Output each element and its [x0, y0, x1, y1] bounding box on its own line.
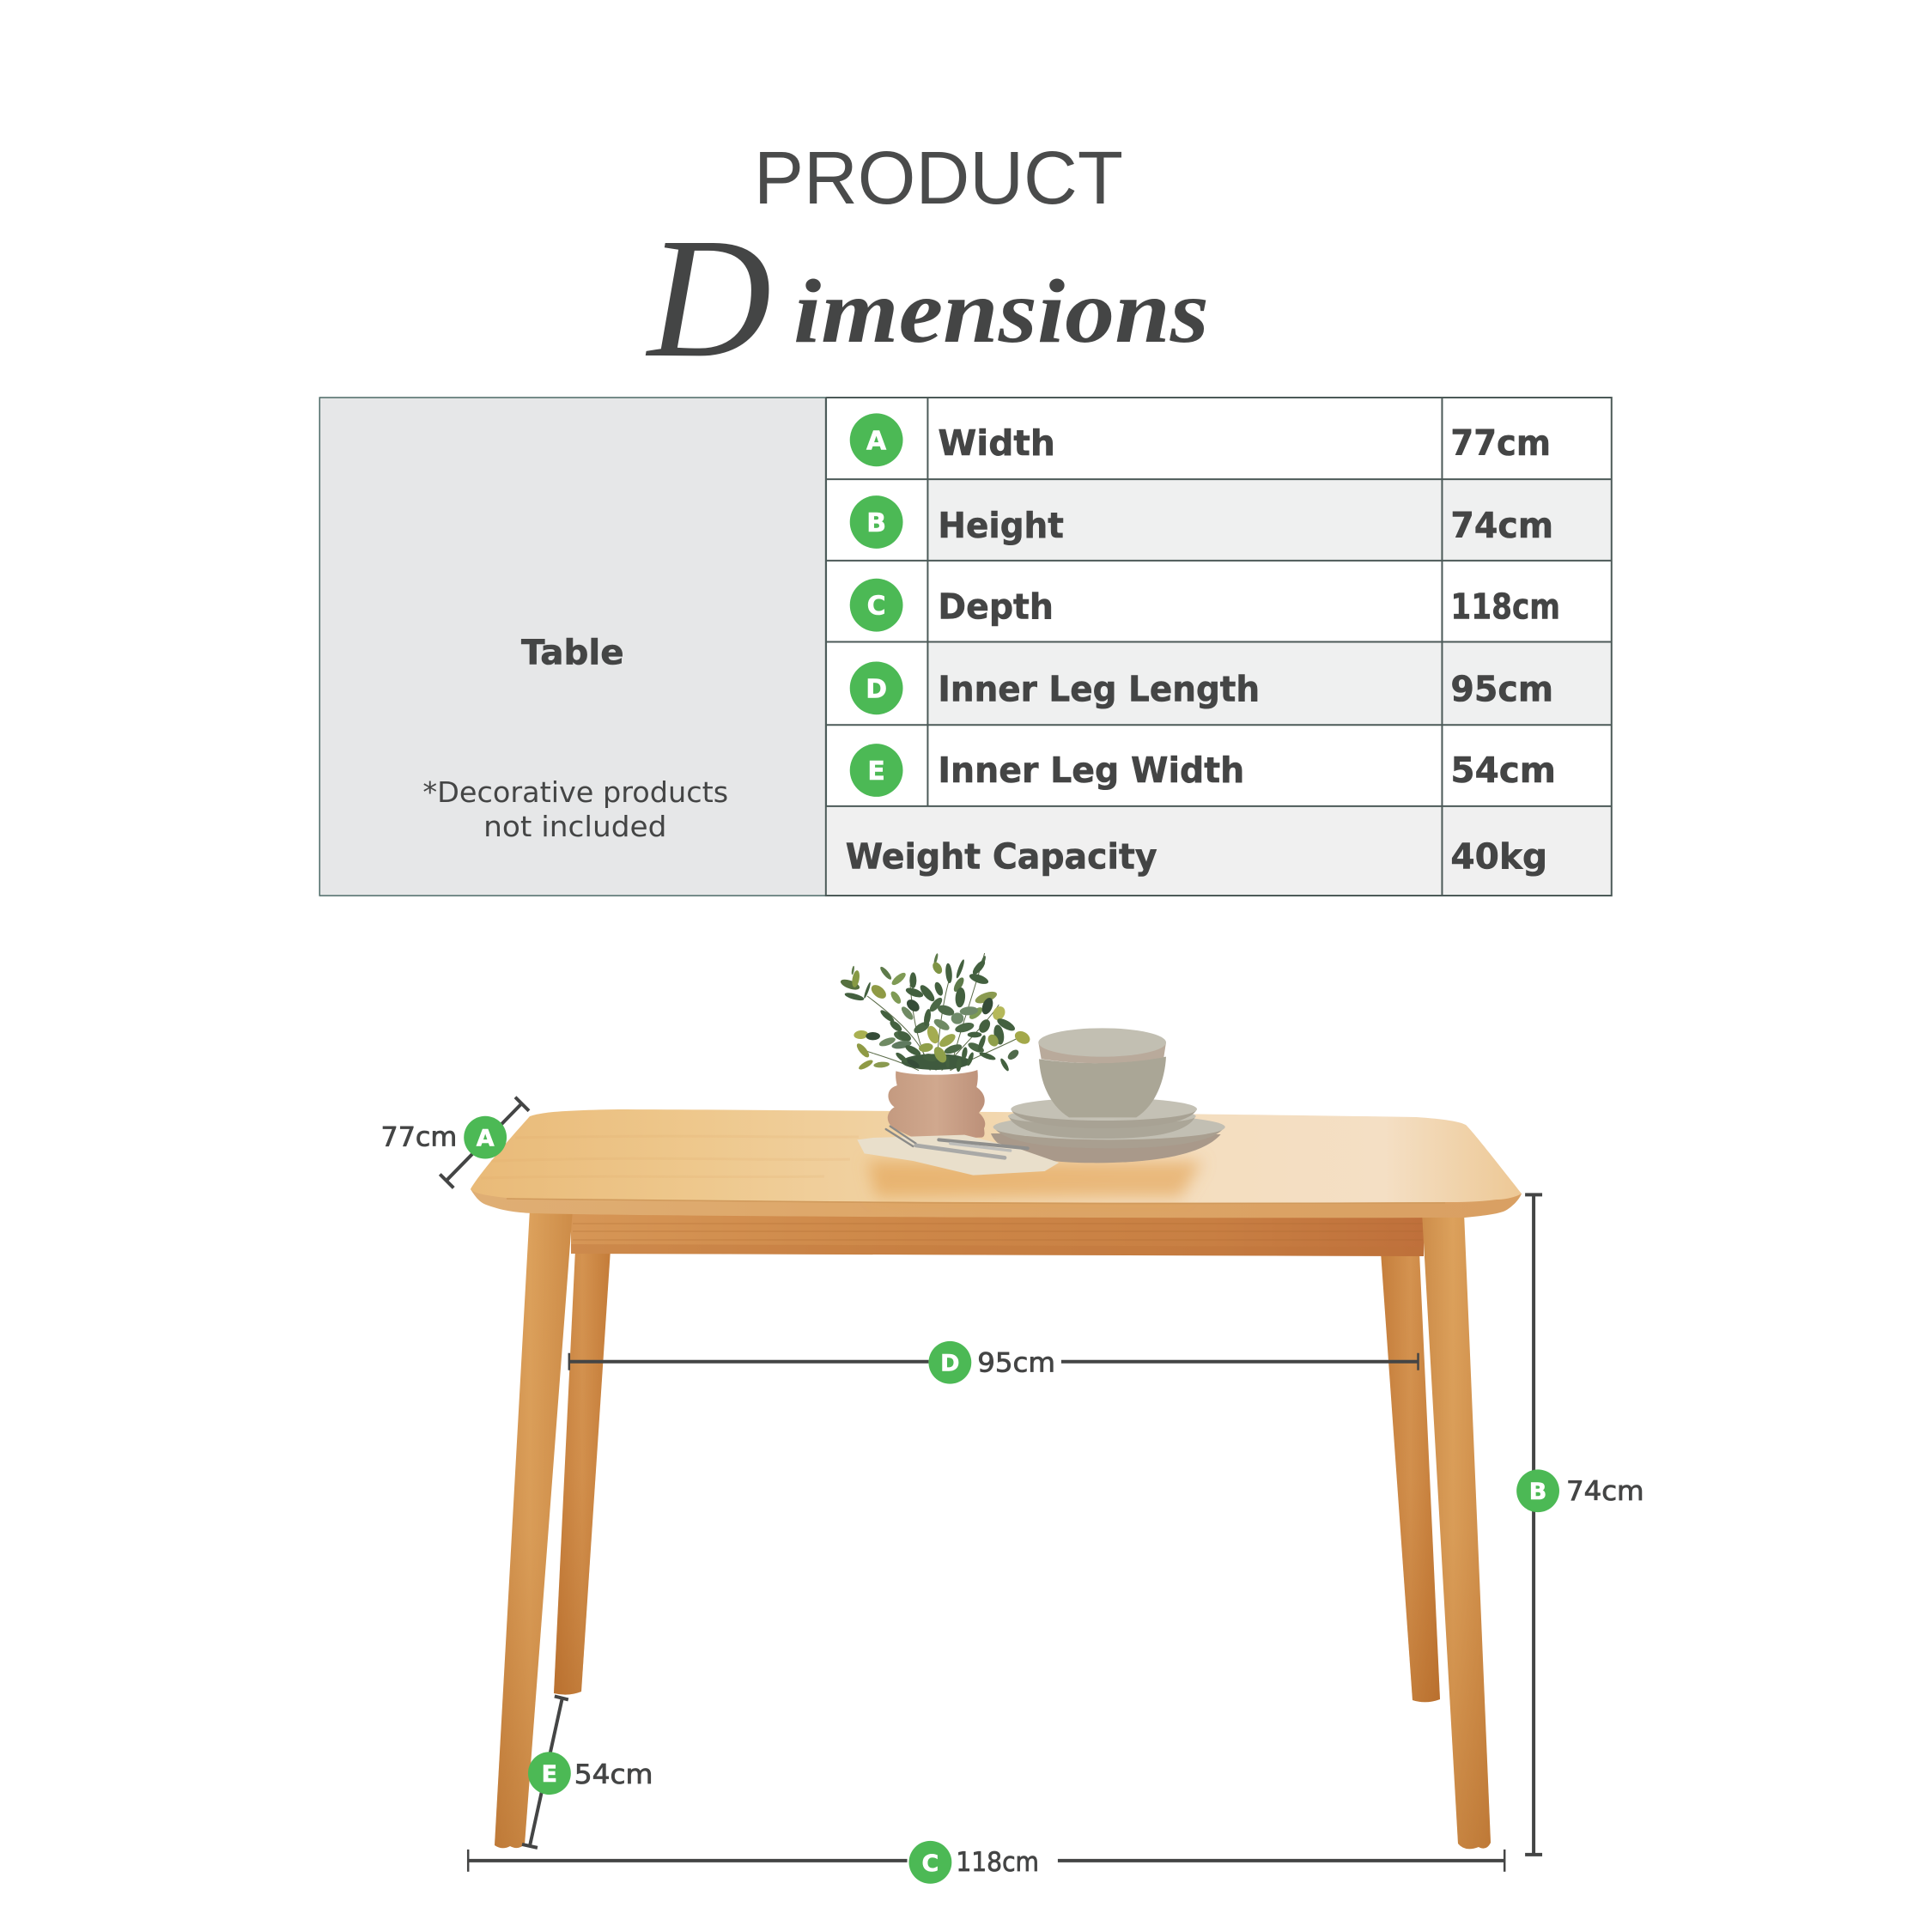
title: Dimensions script: imensions: [793, 261, 1209, 361]
upper bowl: [1038, 1028, 1166, 1063]
dimension A: 77cm: 77cm: [381, 1122, 457, 1153]
row C: Depth: Depth: [938, 586, 1054, 628]
row shading: Weight Capacity: [826, 806, 1612, 896]
row: Weight Capacity: [846, 836, 1547, 878]
plant leaves: [839, 958, 1032, 1072]
title: Dimensions script: D: [645, 204, 771, 393]
plant stems: [865, 953, 1016, 1071]
row: Weight Capacity: 40kg: [1450, 836, 1547, 878]
second plate: [1008, 1108, 1196, 1139]
dimension A: 77cm: A: [477, 1126, 495, 1152]
top plate: [1011, 1097, 1197, 1128]
front left leg: [495, 1209, 573, 1848]
title: PRODUCT: PRODUCT: [754, 137, 1123, 220]
apron: [571, 1212, 1424, 1256]
dimension D: 95cm: [569, 1341, 1419, 1384]
panel: table name cell: [319, 398, 826, 896]
dimension B: 74cm: B: [1529, 1479, 1546, 1505]
label: Table: Table: [521, 633, 624, 672]
row B: Height: B: [866, 508, 886, 538]
dimension C: 118cm: [468, 1841, 1504, 1884]
dimension D: 95cm: 95cm: [977, 1348, 1055, 1379]
dimension E: 54cm: E: [542, 1761, 557, 1788]
cutlery: [886, 1127, 1028, 1157]
row D: Inner Leg Length: [850, 661, 1553, 714]
row E: Inner Leg Width: E: [867, 756, 885, 787]
napkin: [857, 1135, 1059, 1176]
row C: Depth: [850, 579, 1560, 632]
row D: Inner Leg Length: 95cm: [1450, 668, 1553, 709]
row A: Width: [850, 413, 1551, 466]
row A: Width: 77cm: [1450, 422, 1551, 464]
table top grain: [481, 1136, 859, 1178]
decor: plant, pot, tableware: [839, 953, 1225, 1176]
specification table: [319, 397, 1612, 896]
dimension E: 54cm: 54cm: [574, 1759, 653, 1790]
plant foliage mass: [851, 953, 987, 1070]
dimension B: 74cm: [1516, 1194, 1644, 1855]
row C: Depth: 118cm: [1450, 586, 1560, 628]
terracotta pot: [888, 1070, 985, 1139]
dimension A: 77cm: [381, 1097, 529, 1188]
decor reflection: [867, 1161, 1202, 1197]
lower bowl: [1039, 1057, 1166, 1117]
dimension C: 118cm: C: [922, 1850, 939, 1877]
dimension D: 95cm: D: [940, 1351, 960, 1377]
row: Weight Capacity: Weight Capacity: [846, 836, 1157, 878]
back right leg: [1381, 1252, 1440, 1702]
back left leg: [554, 1249, 611, 1695]
row B: Height: [850, 495, 1553, 549]
table top surface: [471, 1109, 1522, 1203]
note: decorative products: not included: [483, 810, 666, 843]
product image: wooden table: [471, 1109, 1522, 1849]
fourth plate: [991, 1133, 1221, 1163]
note: decorative products: *Decorative products: [422, 775, 728, 809]
front right leg: [1422, 1212, 1491, 1849]
row B: Height: 74cm: [1450, 505, 1553, 546]
row E: Inner Leg Width: [850, 744, 1556, 797]
row E: Inner Leg Width: Inner Leg Width: [938, 750, 1244, 791]
row shading: Height: [927, 479, 1612, 561]
dimension C: 118cm: 118cm: [956, 1847, 1039, 1878]
third plate: [993, 1115, 1225, 1148]
table top edge: [471, 1185, 1522, 1218]
dimension E: 54cm: [522, 1696, 653, 1848]
row D: Inner Leg Length: D: [866, 674, 887, 704]
row B: Height: Height: [938, 505, 1064, 546]
row E: Inner Leg Width: 54cm: [1450, 750, 1556, 791]
row C: Depth: C: [867, 592, 886, 622]
table grid lines: [826, 397, 1612, 896]
row shading: Inner Leg Length: [927, 642, 1612, 725]
dimension B: 74cm: 74cm: [1566, 1476, 1644, 1507]
front edge highlight: [507, 1199, 1445, 1204]
row A: Width: A: [866, 426, 886, 456]
row A: Width: Width: [938, 422, 1055, 464]
row D: Inner Leg Length: Inner Leg Length: [938, 668, 1260, 709]
